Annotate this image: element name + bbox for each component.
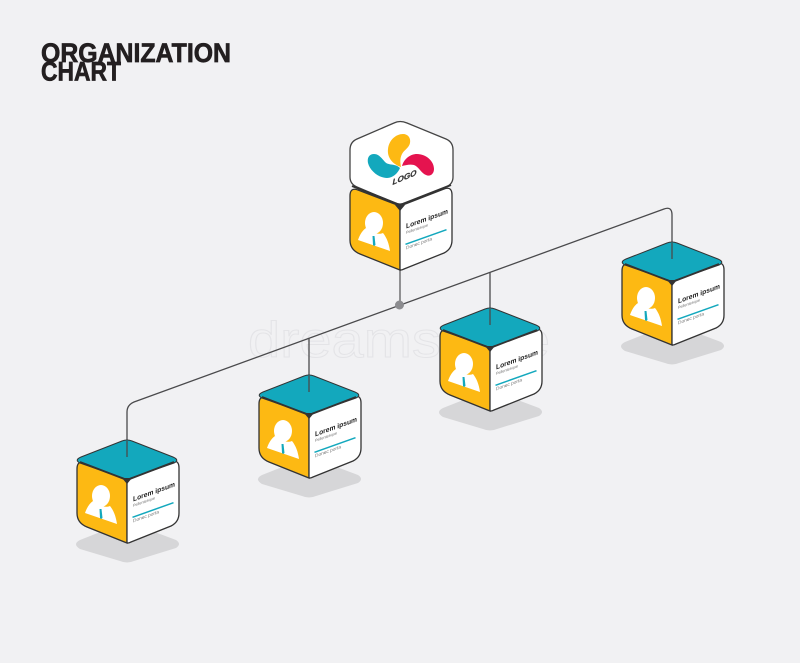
yellow face [259, 397, 309, 478]
yellow face [622, 264, 672, 345]
card text [314, 415, 357, 459]
shadow [621, 326, 724, 364]
title: ORGANIZATION [41, 38, 231, 68]
card text [132, 480, 175, 524]
card text [678, 282, 720, 326]
logo hexagon [350, 122, 453, 204]
card text: Donec porta [406, 236, 432, 251]
card text: Pellentesque [496, 363, 519, 376]
card text: Donec porta [678, 311, 704, 326]
top cube: logo and manager card [350, 122, 453, 270]
card text: Pellentesque [406, 222, 429, 235]
connector node [395, 300, 404, 310]
teal top face [622, 242, 722, 281]
card text: Donec porta [496, 377, 522, 392]
card text: Lorem ipsum [133, 480, 175, 503]
teal top face [259, 375, 359, 414]
shadow [439, 392, 542, 430]
card text: Lorem ipsum [315, 415, 357, 438]
logo text: LOGO [392, 167, 417, 187]
white face [127, 461, 179, 543]
yellow face [77, 462, 127, 543]
card text [406, 207, 448, 251]
title [41, 38, 231, 86]
person icon [267, 420, 299, 459]
card text: Lorem ipsum [678, 282, 720, 305]
shadow [76, 524, 179, 562]
white face [672, 263, 724, 345]
teal top face [440, 308, 540, 347]
person icon [85, 485, 117, 524]
watermark: dreamstime [248, 312, 550, 368]
card text: Pellentesque [315, 430, 338, 443]
person icon [448, 353, 480, 392]
connector lines [127, 208, 672, 457]
cube 2 [258, 375, 361, 498]
card text: Lorem ipsum [406, 207, 448, 230]
shadow [258, 458, 361, 498]
yellow face [440, 330, 490, 411]
cube 1 [76, 440, 179, 562]
person icon [358, 212, 390, 251]
card text: Pellentesque [133, 495, 156, 508]
white face [309, 396, 361, 478]
cube 4 [621, 242, 724, 364]
card text: Lorem ipsum [496, 348, 538, 371]
card text: Donec porta [133, 509, 159, 524]
person icon [630, 287, 662, 326]
card text [496, 348, 538, 392]
white face [400, 188, 452, 270]
card text: Donec porta [315, 444, 341, 459]
logo mark [368, 134, 434, 187]
yellow face [350, 189, 400, 270]
title: CHART [41, 56, 121, 86]
cube 3 [439, 308, 542, 430]
teal top face [77, 440, 177, 479]
card text: Pellentesque [678, 297, 701, 310]
white face [490, 329, 542, 411]
